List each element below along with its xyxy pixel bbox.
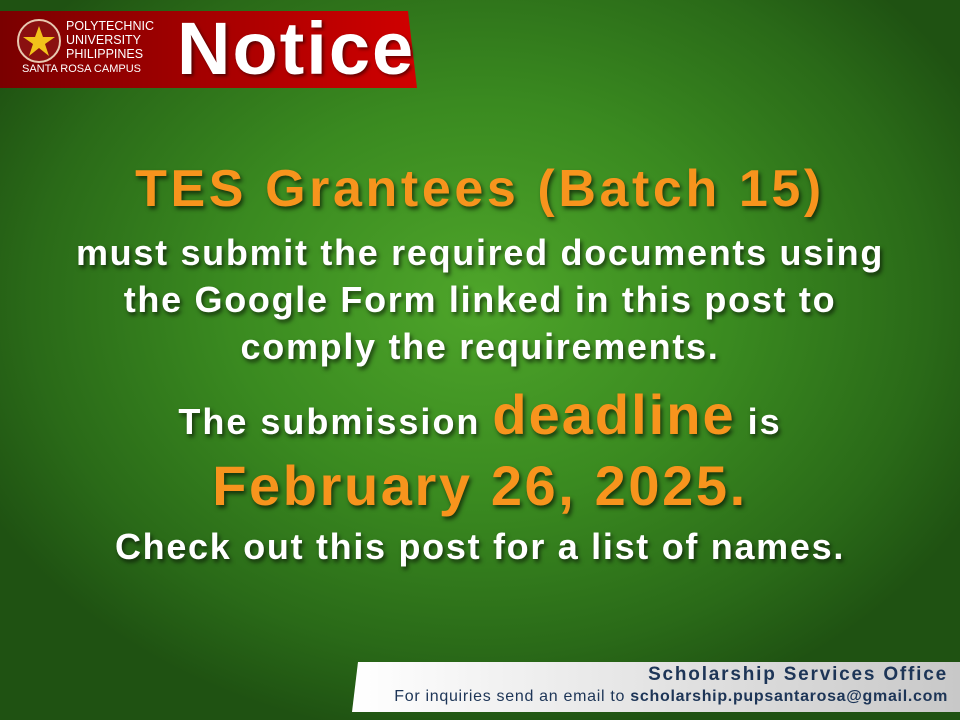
university name: UNIVERSITY [66,33,141,47]
university name: PHILIPPINES [66,47,143,61]
header banner [0,7,417,90]
body text: must submit the required documents using [76,232,884,273]
body text: the Google Form linked in this post to [124,279,836,320]
closing note: Check out this post for a list of names. [115,526,845,567]
footer panel: Scholarship Services Office [648,664,948,685]
university name: SANTA ROSA CAMPUS [22,63,141,75]
deadline line: The submission deadline is [178,383,782,446]
icon: university seal [17,19,61,63]
title: TES Grantees (Batch 15) [135,160,825,218]
body text: comply the requirements. [241,326,719,367]
heading: Notice: Notice [177,7,415,90]
university name: POLYTECHNIC [66,19,154,33]
body text [76,232,884,372]
date: February 26, 2025. [212,454,748,517]
footer panel [352,662,960,712]
footer panel: For inquiries send an email to scholarship.pupsantarosa@gmail.com [394,688,948,705]
university name [22,19,154,75]
